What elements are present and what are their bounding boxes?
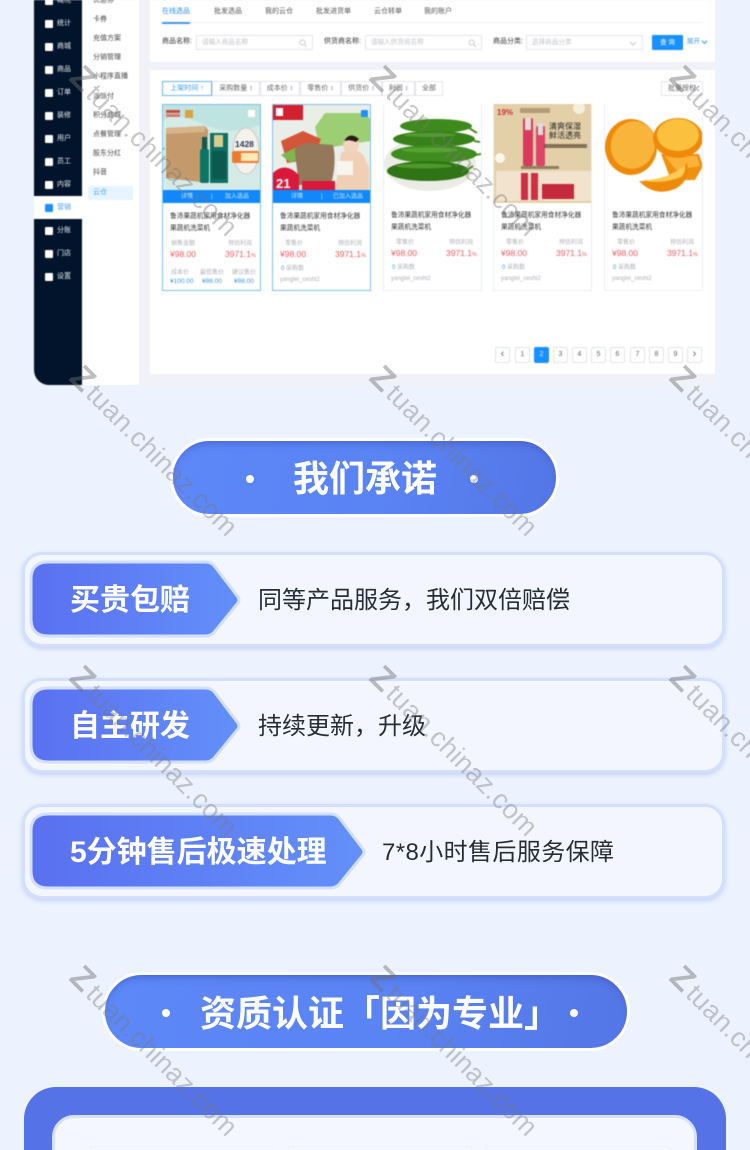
product card 2 bbox=[272, 104, 371, 291]
sort buttons: 供货价 ↕ bbox=[348, 85, 375, 92]
watermarks: Ztuan.chinaz.com bbox=[63, 58, 244, 242]
nav labels bbox=[44, 0, 72, 282]
price block: 最低售价 bbox=[200, 270, 224, 276]
panel: product list bbox=[150, 70, 715, 374]
watermarks: Ztuan.chinaz.com bbox=[363, 58, 544, 242]
search filters: 商品名称: bbox=[162, 38, 192, 45]
nav labels: 商城 bbox=[57, 43, 71, 50]
pagination: 1 bbox=[521, 351, 524, 358]
label shape bbox=[30, 560, 240, 638]
price block: 预估利润 bbox=[228, 241, 252, 247]
search filters: 请输入商品名称 bbox=[202, 39, 248, 46]
secondary menu column bbox=[82, 0, 139, 385]
highlighted menu item bbox=[88, 186, 133, 200]
price block: ¥98.00 bbox=[170, 249, 196, 259]
price block: 销售金额 bbox=[171, 241, 195, 247]
tabs: 批发进货单 bbox=[316, 8, 351, 15]
price block: 0 采购数 bbox=[392, 265, 415, 271]
product image: cucumbers bbox=[384, 118, 482, 191]
price block bbox=[280, 239, 366, 283]
panel: 自主研发 bbox=[22, 678, 725, 773]
watermarks: Ztuan.chinaz.com bbox=[363, 658, 544, 842]
sort buttons: 成本价 ↕ bbox=[267, 85, 293, 92]
price block: yanglei_ceshi2 bbox=[391, 276, 431, 282]
tabs: 云仓转单 bbox=[374, 8, 402, 15]
decorative dot right bbox=[570, 1009, 578, 1017]
nav labels: 装修 bbox=[57, 112, 71, 119]
price block: 3971.1% bbox=[335, 249, 366, 259]
product title: 果蔬机洗菜机 bbox=[170, 224, 210, 232]
action bar: 详情 bbox=[291, 194, 303, 200]
secondary menu labels: 云仓 bbox=[93, 189, 107, 196]
price block: ¥98.00 bbox=[234, 278, 254, 285]
nav labels: 门店 bbox=[57, 250, 71, 257]
product title: 果蔬机洗菜机 bbox=[501, 224, 541, 230]
search filters: 查 询 bbox=[660, 39, 675, 46]
price block bbox=[170, 239, 256, 285]
price block: 成本价 bbox=[171, 270, 189, 276]
price block: ¥98.00 bbox=[391, 248, 417, 258]
product title: 鲁沛果蔬机家用食材净化器 bbox=[170, 213, 250, 220]
product card 5 bbox=[604, 104, 703, 291]
content background bbox=[139, 0, 715, 385]
label text: 买贵包赔 bbox=[70, 584, 190, 617]
action bar bbox=[163, 190, 260, 203]
price block: 零售价 bbox=[396, 240, 414, 246]
heading banner: 我们承诺 bbox=[170, 438, 559, 517]
product title bbox=[280, 212, 360, 232]
price block bbox=[612, 238, 698, 282]
nav labels: 营销 bbox=[57, 204, 71, 211]
panel: filter bar bbox=[150, 0, 715, 62]
product image: skincare: 19% bbox=[497, 108, 513, 117]
pagination: 7 bbox=[636, 351, 639, 358]
action bar bbox=[273, 190, 370, 203]
price block: 预估利润 bbox=[338, 241, 362, 247]
panel: 5分钟售后极速处理 bbox=[22, 804, 725, 899]
tabs: 在线选品 bbox=[162, 8, 190, 15]
pagination: 4 bbox=[578, 351, 581, 358]
price block bbox=[390, 238, 478, 282]
secondary menu labels: 派派付 bbox=[93, 93, 114, 100]
action bar: 详情 bbox=[181, 194, 193, 200]
nav labels: 设置 bbox=[57, 273, 71, 280]
label shape bbox=[30, 812, 366, 890]
watermarks: Ztuan.chinaz.com bbox=[63, 658, 244, 842]
nav labels: 统计 bbox=[57, 20, 71, 27]
tabs bbox=[161, 6, 702, 25]
tabs: 我的账户 bbox=[424, 8, 452, 15]
heading text: 我们承诺 bbox=[293, 458, 437, 499]
description: 持续更新，升级 bbox=[258, 713, 426, 740]
heading text: 资质认证「因为专业」 bbox=[200, 993, 560, 1034]
product title: 果蔬机洗菜机 bbox=[391, 224, 431, 230]
product title: 鲁沛果蔬机家用食材净化器 bbox=[280, 213, 360, 220]
product title bbox=[612, 210, 692, 231]
price block: 3971.1% bbox=[667, 248, 698, 258]
product image: liquor box: 1428 bbox=[235, 139, 254, 149]
decorative dot right bbox=[470, 475, 478, 483]
label text: 5分钟售后极速处理 bbox=[70, 836, 327, 869]
product image: bread bbox=[272, 104, 371, 191]
sort buttons: 零售价 ↕ bbox=[307, 85, 334, 92]
pagination: 3 bbox=[559, 351, 562, 358]
pagination: 8 bbox=[655, 351, 658, 358]
price block: 3971.1% bbox=[225, 249, 256, 259]
panel: software screenshot bbox=[33, 0, 715, 386]
product image: skincare bbox=[494, 104, 592, 204]
search filters: 商品分类: bbox=[493, 38, 523, 45]
secondary menu labels: 小程序直播 bbox=[93, 73, 128, 80]
certificate frame 1 bbox=[90, 1146, 274, 1150]
pagination: ‹ bbox=[501, 348, 504, 360]
sort buttons: 批量授权 bbox=[668, 85, 696, 92]
active nav item bbox=[34, 196, 82, 219]
nav labels: 商品 bbox=[57, 66, 71, 73]
price block: ¥100.00 bbox=[170, 278, 194, 285]
sidebar navigation bbox=[34, 0, 82, 385]
product title bbox=[170, 212, 250, 232]
product card 1 bbox=[162, 104, 261, 291]
price block: yanglei_ceshi2 bbox=[280, 277, 320, 283]
price block: 0 采购数 bbox=[281, 266, 304, 272]
price block: 3971.1% bbox=[446, 248, 477, 258]
secondary menu labels: 卡券 bbox=[93, 16, 107, 23]
description: 同等产品服务，我们双倍赔偿 bbox=[258, 587, 570, 614]
panel: certification bbox=[24, 1087, 726, 1150]
sort buttons: 利润 ↕ bbox=[389, 85, 408, 92]
product title bbox=[500, 210, 582, 231]
secondary menu labels: 分销管理 bbox=[93, 54, 121, 61]
secondary menu labels: 股东分红 bbox=[93, 150, 121, 157]
price block: 0 采购数 bbox=[613, 265, 636, 271]
price block: 预估利润 bbox=[449, 240, 473, 246]
watermarks: Ztuan.chinaz.com bbox=[363, 958, 544, 1142]
product card 4 bbox=[493, 104, 592, 291]
price block: 0 采购数 bbox=[502, 265, 525, 271]
price block: 零售价 bbox=[617, 240, 635, 246]
nav labels: 用户 bbox=[57, 135, 71, 142]
product title: 鲁沛果蔬机家用食材净化器 bbox=[612, 212, 692, 219]
product image: oranges bbox=[604, 117, 703, 193]
price block: 零售价 bbox=[285, 241, 303, 247]
secondary menu labels: 抖音 bbox=[93, 169, 107, 176]
sort buttons: 上架时间 ↑ bbox=[170, 85, 204, 92]
watermarks: Ztuan.chinaz.com bbox=[363, 358, 544, 542]
price block: yanglei_ceshi2 bbox=[501, 276, 541, 282]
action bar: | bbox=[211, 194, 213, 200]
panel: 买贵包赔 bbox=[22, 552, 725, 647]
search filters bbox=[162, 34, 708, 51]
secondary menu labels: 积分商城 bbox=[93, 112, 121, 119]
product card 3 bbox=[383, 104, 482, 291]
product title: 果蔬机洗菜机 bbox=[612, 224, 652, 230]
price block bbox=[500, 238, 588, 282]
product title: 鲁沛果蔬机家用食材净化器 bbox=[501, 212, 581, 219]
product image: liquor box bbox=[162, 104, 260, 190]
sort buttons: 采购数量 ↕ bbox=[219, 85, 253, 92]
pagination: 5 bbox=[597, 351, 600, 358]
nav labels: 订单 bbox=[57, 89, 71, 96]
price block: 预估利润 bbox=[559, 240, 583, 246]
search filters: 请输入供货商名称 bbox=[371, 39, 424, 46]
action bar: 已加入选品 bbox=[333, 194, 363, 200]
decorative dot left bbox=[162, 1009, 170, 1017]
action bar: | bbox=[321, 194, 323, 200]
price block: ¥98.00 bbox=[202, 278, 222, 285]
pagination: 2 bbox=[540, 351, 543, 358]
label shape bbox=[30, 686, 240, 764]
tabs: 我的云仓 bbox=[265, 8, 293, 15]
nav labels: 员工 bbox=[57, 158, 71, 165]
search filters: 供货商名称: bbox=[324, 38, 361, 45]
product title bbox=[390, 210, 472, 231]
pagination: › bbox=[693, 348, 696, 360]
price block: 预估利润 bbox=[670, 240, 694, 246]
search filters: 选择商品分类 bbox=[532, 39, 572, 46]
decorative dot left bbox=[246, 475, 254, 483]
inner white card bbox=[52, 1115, 697, 1150]
nav labels: 分账 bbox=[57, 227, 71, 234]
watermarks: Ztuan.chinaz.com bbox=[63, 358, 244, 542]
pagination bbox=[494, 346, 702, 364]
pagination: 6 bbox=[616, 351, 619, 358]
price block: 3971.1% bbox=[556, 248, 587, 258]
product image: skincare: 鲜活透亮 bbox=[549, 130, 581, 140]
action bar: 加入选品 bbox=[225, 194, 249, 200]
product image: skincare: 清爽保湿 bbox=[549, 121, 581, 131]
secondary menu labels: 充值方案 bbox=[93, 35, 121, 42]
secondary menu labels bbox=[92, 0, 128, 196]
sort buttons: 全部 bbox=[422, 85, 436, 92]
label text: 自主研发 bbox=[70, 710, 190, 743]
price block: ¥98.00 bbox=[612, 248, 638, 258]
price block: 零售价 bbox=[506, 240, 524, 246]
secondary menu labels: 点餐管理 bbox=[93, 131, 121, 138]
certificate frame 3 bbox=[485, 1146, 669, 1150]
tabs: 批发选品 bbox=[214, 8, 242, 15]
pagination: 9 bbox=[674, 351, 677, 358]
description: 7*8小时售后服务保障 bbox=[382, 839, 614, 866]
product title: 鲁沛果蔬机家用食材净化器 bbox=[391, 212, 471, 219]
product title: 果蔬机洗菜机 bbox=[280, 224, 320, 232]
search filters: 展开 bbox=[687, 38, 700, 45]
sort buttons bbox=[161, 80, 704, 97]
watermarks: Ztuan.chinaz.com bbox=[63, 958, 244, 1142]
certificate frame 2 bbox=[288, 1146, 472, 1150]
price block: ¥98.00 bbox=[501, 248, 527, 258]
nav labels: 内容 bbox=[57, 181, 71, 188]
price block: ¥98.00 bbox=[280, 249, 306, 259]
price block: yanglei_ceshi2 bbox=[612, 276, 652, 282]
price block: 建议售价 bbox=[232, 270, 256, 276]
heading banner: 资质认证 bbox=[102, 972, 630, 1051]
